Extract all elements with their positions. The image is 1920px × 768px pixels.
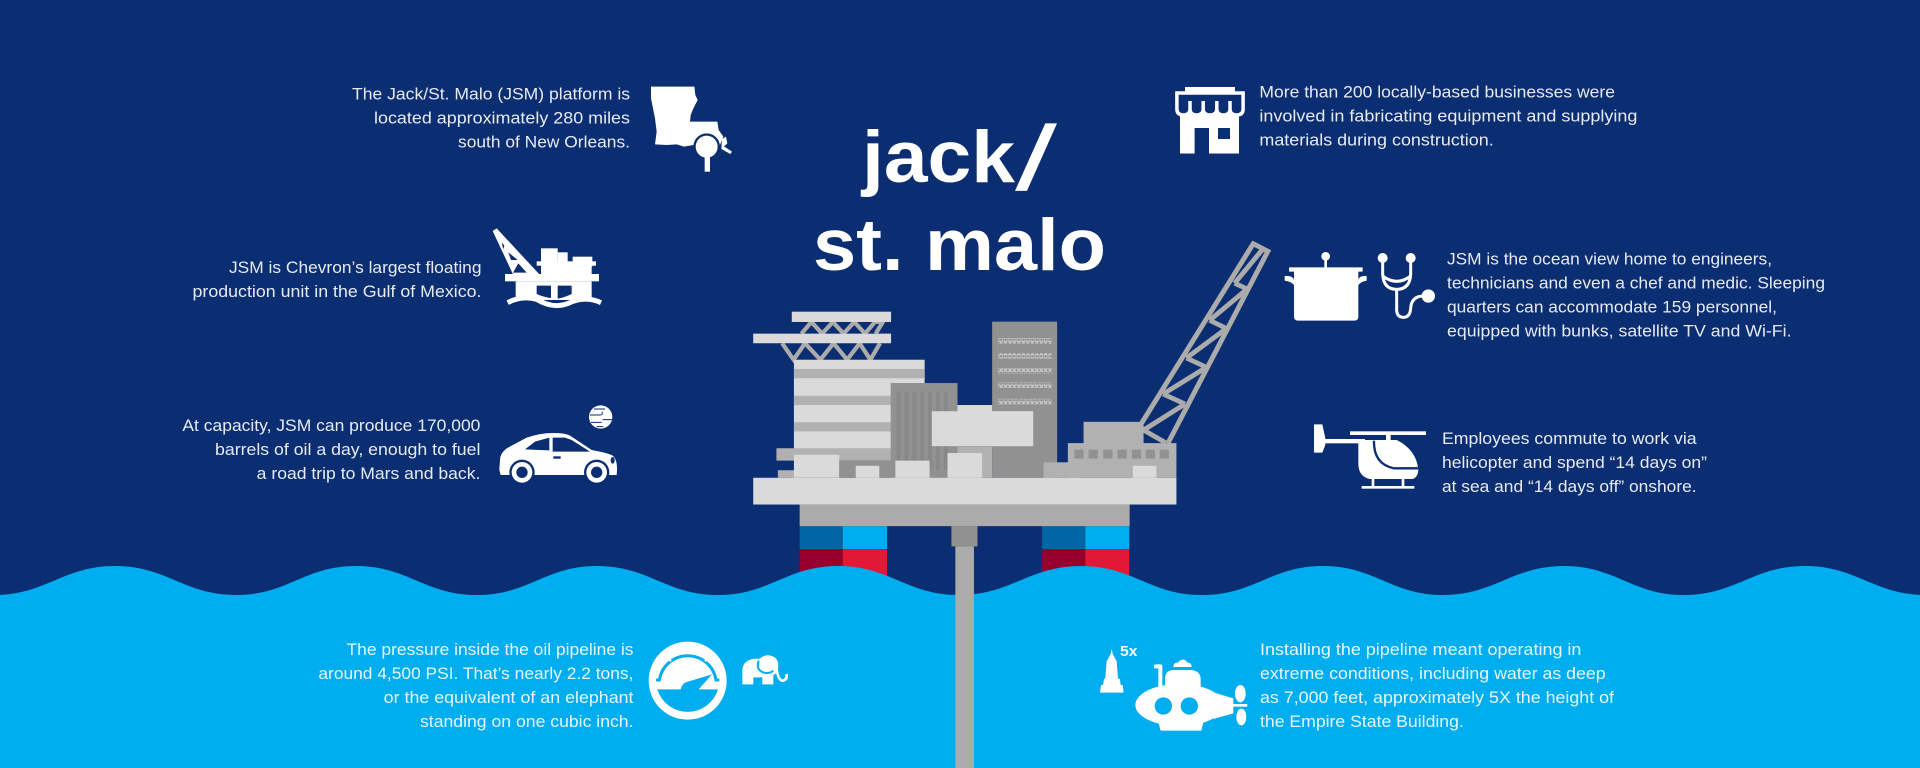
fact: pipeline pressure: standing on one cubic inch. — [420, 712, 634, 731]
fact: location — [352, 84, 630, 152]
fact: living quarters: equipped with bunks, satellite TV and Wi-Fi. — [1447, 322, 1792, 340]
title — [813, 108, 1106, 286]
fact: helicopter commute: Employees commute to work via — [1442, 429, 1697, 448]
fact: living quarters: technicians and even a chef and medic. Sleeping — [1447, 274, 1825, 292]
ground machinery — [839, 461, 958, 478]
icon: storefront — [1177, 87, 1243, 154]
deck equipment boxes — [794, 453, 1156, 478]
title: st. malo — [813, 205, 1106, 286]
crane house — [1044, 422, 1176, 478]
fact: pipeline pressure: around 4,500 PSI. That’s nearly 2.2 tons, — [318, 664, 633, 683]
oil platform illustration — [753, 244, 1268, 768]
fact: production capacity: At capacity, JSM can produce 170,000 — [182, 416, 480, 435]
fact: pipeline pressure: The pressure inside the oil pipeline is — [346, 640, 634, 659]
title: / — [1015, 108, 1058, 210]
fact: largest floating unit: production unit in the Gulf of Mexico. — [192, 282, 482, 301]
fact: living quarters — [1447, 250, 1825, 340]
helideck trusses — [782, 322, 883, 360]
fact: extreme depth: the Empire State Building. — [1260, 712, 1464, 731]
icon: submarine — [1135, 660, 1247, 731]
fact: extreme depth: Installing the pipeline meant operating in — [1260, 640, 1581, 659]
crane boom — [1142, 244, 1268, 443]
helideck — [753, 334, 891, 343]
icon: Empire State Building — [1100, 649, 1124, 693]
label: 5x: 5x — [1120, 643, 1138, 660]
fact: local businesses: More than 200 locally-based businesses were — [1259, 82, 1615, 102]
fact: living quarters: quarters can accommodate 159 personnel, — [1447, 298, 1777, 316]
icon: Louisiana map with pin — [651, 87, 732, 172]
tall tower — [992, 322, 1057, 478]
fact: living quarters: JSM is the ocean view home to engineers, — [1447, 250, 1772, 268]
icon: floating platform — [493, 228, 601, 306]
icon: cooking pot — [1285, 252, 1367, 321]
riser connector — [951, 526, 977, 546]
fact: largest floating unit — [192, 258, 482, 301]
substructure — [800, 505, 1130, 526]
fact: local businesses — [1259, 82, 1637, 150]
ocean water — [0, 566, 1920, 768]
fact: local businesses: materials during construction. — [1259, 130, 1494, 150]
fact: location: The Jack/St. Malo (JSM) platform is — [352, 84, 630, 104]
fact: extreme depth — [1260, 640, 1614, 731]
fact: local businesses: involved in fabricating equipment and supplying — [1259, 106, 1637, 126]
fact: helicopter commute — [1442, 429, 1707, 496]
fact: helicopter commute: helicopter and spend “14 days on” — [1442, 453, 1707, 472]
icon: pressure gauge — [649, 642, 727, 720]
main deck — [753, 478, 1176, 505]
pipeline — [955, 546, 974, 768]
icon: car and Mars — [499, 405, 617, 485]
fact: extreme depth: as 7,000 feet, approximately 5X the height of — [1260, 688, 1614, 707]
fact: location: located approximately 280 miles — [374, 108, 630, 128]
accommodation block — [776, 360, 926, 478]
central module — [932, 405, 1033, 478]
fact: production capacity: a road trip to Mars and back. — [257, 464, 480, 483]
icon: helicopter — [1314, 424, 1426, 489]
fact: largest floating unit: JSM is Chevron’s largest floating — [229, 258, 482, 277]
fact: production capacity — [182, 416, 480, 483]
fact: location: south of New Orleans. — [458, 132, 630, 152]
icon: stethoscope — [1378, 253, 1435, 317]
platform legs — [800, 526, 1129, 587]
fact: production capacity: barrels of oil a day, enough to fuel — [215, 440, 480, 459]
title: jack — [860, 117, 1015, 198]
upper deck — [792, 312, 891, 322]
icon: Mars — [589, 405, 612, 429]
fact: extreme depth: extreme conditions, including water as deep — [1260, 664, 1606, 683]
icon: elephant — [742, 655, 787, 684]
fact: pipeline pressure: or the equivalent of an elephant — [384, 688, 634, 707]
fact: helicopter commute: at sea and “14 days off” onshore. — [1442, 477, 1697, 496]
fact: pipeline pressure — [318, 640, 634, 731]
ribbed module — [891, 383, 957, 478]
